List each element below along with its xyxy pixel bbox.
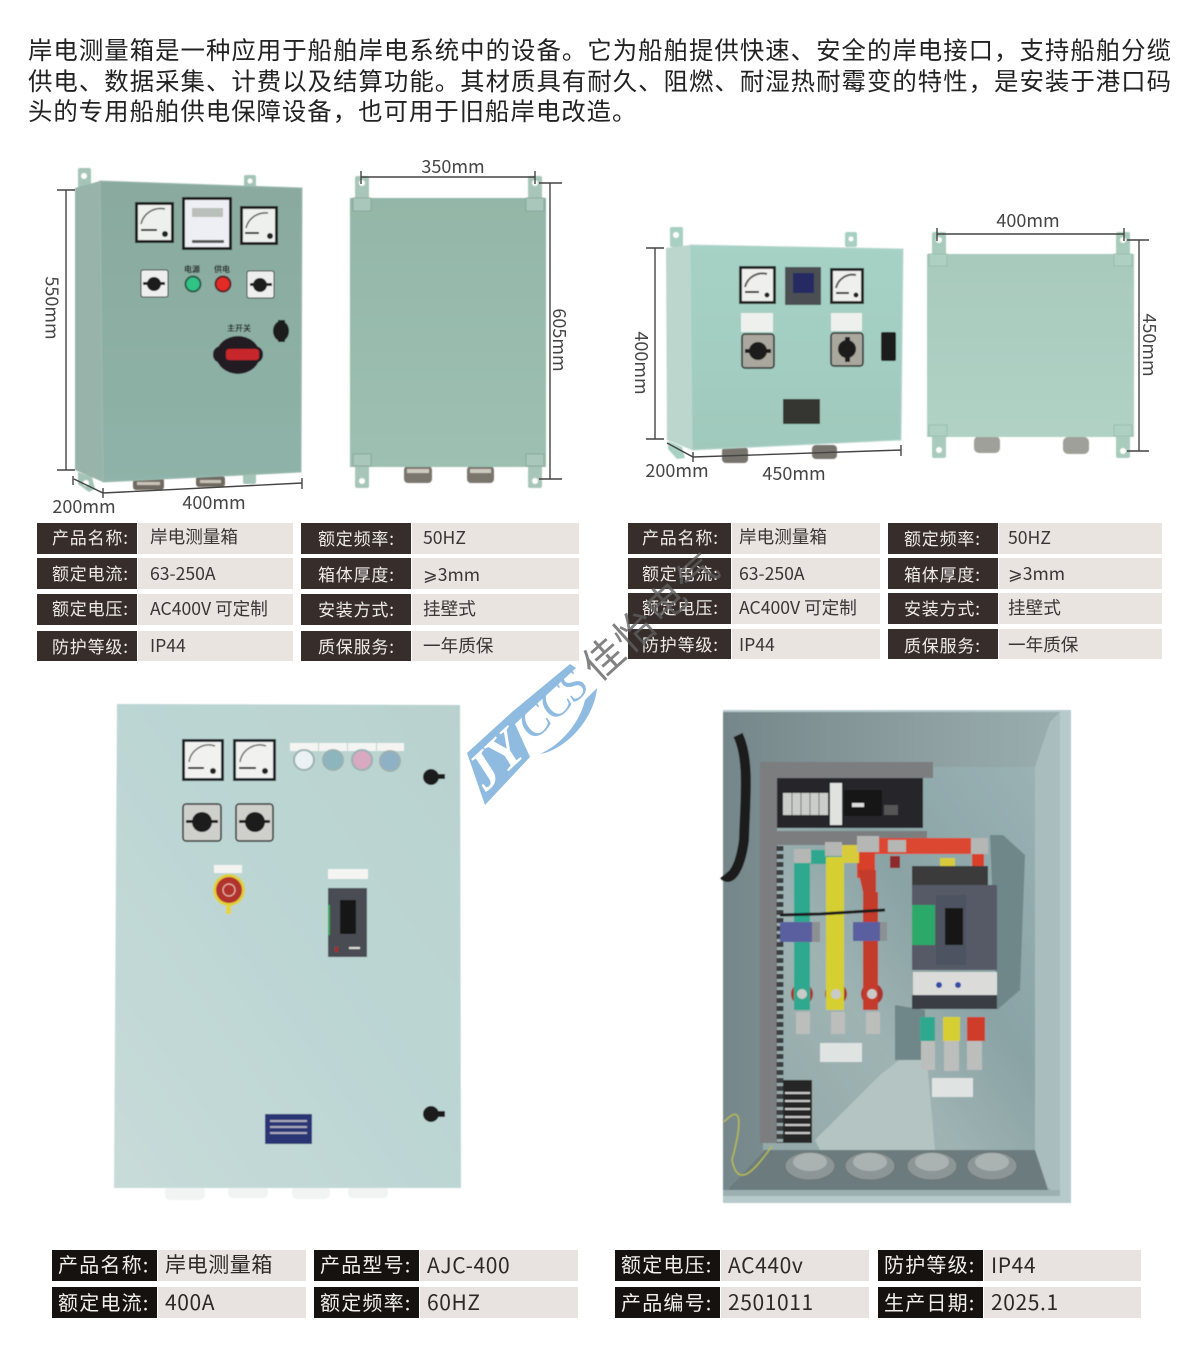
spec table bottom left: 产品名称: bbox=[58, 1249, 150, 1278]
spec table top left bbox=[37, 523, 579, 661]
spec table bottom right: 产品编号: bbox=[621, 1287, 713, 1316]
door lock bbox=[881, 332, 896, 361]
spec table bottom right: 额定电压: bbox=[621, 1249, 713, 1278]
indicator lamps bbox=[294, 750, 400, 771]
spec table top right: 质保服务: bbox=[904, 632, 981, 657]
spec table bottom right: 生产日期: bbox=[884, 1287, 976, 1316]
rotary switches bbox=[742, 333, 863, 368]
spec table bottom left: 400A bbox=[165, 1287, 215, 1317]
outgoing legs bbox=[920, 1017, 985, 1071]
intro paragraph: 供电、数据采集、计费以及结算功能。其材质具有耐久、阻燃、耐湿热耐霉变的特性，是安装于港口码 bbox=[28, 63, 1172, 98]
wiring bbox=[780, 910, 885, 915]
dimensions: front box bbox=[40, 190, 302, 519]
meter left bbox=[135, 202, 174, 243]
emergency stop bbox=[213, 865, 245, 914]
meters bbox=[182, 739, 276, 781]
spec table bottom left: AJC-400 bbox=[427, 1250, 510, 1280]
product photo: 400x450 back view bbox=[927, 232, 1134, 458]
circuit breaker bbox=[328, 869, 368, 957]
spec table top left: 质保服务: bbox=[318, 633, 395, 658]
spec table top right: 防护等级: bbox=[642, 631, 719, 656]
dimensions: 450 box bbox=[629, 248, 901, 486]
mounting ears bbox=[932, 232, 1130, 458]
breaker shadow bbox=[895, 835, 1025, 1060]
slotted duct bbox=[776, 846, 784, 1143]
spec table top left: 产品名称: bbox=[52, 524, 129, 549]
dimensions: front box: 550mm bbox=[40, 276, 66, 340]
spec table top left: AC400V 可定制 bbox=[150, 596, 268, 621]
spec table top left: ⩾3mm bbox=[423, 562, 480, 587]
intro paragraph bbox=[28, 32, 1172, 128]
watermark: JYCCS logo bbox=[455, 660, 597, 805]
spec table bottom right: IP44 bbox=[991, 1250, 1036, 1280]
panel labels: 电源 bbox=[184, 264, 200, 275]
spec table top left: 额定电压: bbox=[52, 595, 129, 620]
spec table bottom right bbox=[615, 1249, 1141, 1318]
door panel bbox=[114, 704, 461, 1188]
spec table top left: 挂壁式 bbox=[423, 596, 476, 621]
spec table top right: 挂壁式 bbox=[1008, 595, 1061, 620]
spec table top right: 箱体厚度: bbox=[904, 561, 981, 586]
spec table top right bbox=[628, 523, 1162, 659]
spec table top left: 防护等级: bbox=[52, 633, 129, 658]
rotary switches bbox=[141, 270, 274, 298]
label plates bbox=[741, 313, 862, 332]
mounting tabs bbox=[78, 168, 256, 492]
cable ducts bbox=[760, 762, 933, 1143]
spec table top right: 50HZ bbox=[1008, 525, 1051, 550]
product photo: 450x400 box front bbox=[666, 227, 903, 463]
spec table bottom left: 岸电测量箱 bbox=[165, 1249, 273, 1279]
dimensions: front box: 400mm bbox=[182, 489, 246, 515]
cable glands bbox=[722, 445, 837, 463]
insulators bbox=[791, 983, 883, 1005]
dimensions: 450 box: 400mm bbox=[629, 331, 655, 395]
spec table top right: ⩾3mm bbox=[1008, 561, 1065, 586]
dimensions: 450 box: 450mm bbox=[762, 460, 826, 486]
spec table top left: 箱体厚度: bbox=[318, 561, 395, 586]
box side bbox=[75, 181, 103, 482]
current transformers bbox=[780, 922, 887, 942]
indicator lamps bbox=[184, 276, 232, 292]
spec table top right: 产品名称: bbox=[642, 524, 719, 549]
product photo: open cabinet interior bbox=[723, 710, 1071, 1203]
dimensions: back box bbox=[361, 153, 573, 479]
panel labels: 主开关 bbox=[227, 323, 251, 334]
intro paragraph: 岸电测量箱是一种应用于船舶岸电系统中的设备。它为船舶提供快速、安全的岸电接口，支持船舶分缆 bbox=[28, 32, 1172, 67]
breaker bbox=[912, 866, 997, 1009]
meter center bbox=[182, 197, 232, 250]
spec table bottom right: AC440v bbox=[728, 1250, 803, 1280]
rotary switches bbox=[183, 804, 273, 841]
cable glands bbox=[404, 466, 494, 483]
spec table top left: 额定电流: bbox=[52, 560, 129, 585]
door locks bbox=[423, 769, 445, 1122]
box front bbox=[690, 245, 903, 450]
spec table top left: 一年质保 bbox=[423, 633, 494, 658]
spec table top left: IP44 bbox=[150, 633, 186, 658]
enclosure and walls bbox=[723, 710, 1071, 1203]
nameplate bbox=[783, 399, 820, 424]
ground wire bbox=[724, 1114, 772, 1175]
spec table bottom left bbox=[52, 1249, 578, 1318]
spec table bottom left: 60HZ bbox=[427, 1287, 481, 1317]
box back bbox=[927, 254, 1134, 437]
spec table top left: 63-250A bbox=[150, 561, 216, 586]
mounting ears bbox=[355, 176, 542, 488]
intro paragraph: 头的专用船舶供电保障设备，也可用于旧船岸电改造。 bbox=[28, 93, 637, 128]
panel labels: 供电 bbox=[214, 264, 230, 275]
spec table bottom left: 额定频率: bbox=[320, 1287, 412, 1316]
spec table top right: 安装方式: bbox=[904, 595, 981, 620]
spec table top left: 岸电测量箱 bbox=[150, 524, 238, 549]
dimensions: back box: 605mm bbox=[547, 308, 573, 372]
watermark: JYCCS logo: JY bbox=[455, 717, 540, 801]
ear brackets bbox=[929, 254, 1132, 436]
dimensions: 400 back: 450mm bbox=[1137, 313, 1163, 377]
bottom glands bbox=[165, 1186, 388, 1200]
box side bbox=[666, 245, 692, 450]
terminal strip bbox=[783, 1080, 812, 1143]
conduit knockouts bbox=[785, 1152, 1017, 1180]
mounting tabs bbox=[668, 227, 857, 459]
dimensions: 400 back bbox=[937, 207, 1163, 451]
spec table top right: 额定电压: bbox=[642, 594, 719, 619]
spec table bottom left: 额定电流: bbox=[58, 1287, 150, 1316]
product photo: 400x550 box front bbox=[75, 168, 302, 492]
label plates bbox=[820, 1043, 973, 1097]
watermark: JYCCS logo: CCS bbox=[506, 660, 597, 749]
spec table top left: 额定频率: bbox=[318, 525, 395, 550]
busbars bbox=[794, 857, 880, 1034]
cable glands bbox=[974, 436, 1089, 454]
spec table top left: 安装方式: bbox=[318, 596, 395, 621]
meters bbox=[739, 266, 864, 305]
panel labels bbox=[184, 264, 251, 334]
dimensions: 400 back: 400mm bbox=[996, 207, 1060, 233]
box back bbox=[350, 198, 546, 467]
mounting plate bbox=[763, 767, 1035, 1150]
spec table top right: 岸电测量箱 bbox=[739, 524, 827, 549]
spec table top right: AC400V 可定制 bbox=[739, 595, 857, 620]
spec table top left: 50HZ bbox=[423, 525, 466, 550]
label strip bbox=[290, 743, 404, 751]
door lock bbox=[273, 320, 289, 342]
spec table bottom right: 2501011 bbox=[728, 1287, 814, 1317]
watermark: company name: 佳怡电气 bbox=[567, 536, 731, 692]
product photo: large panel front bbox=[114, 704, 461, 1200]
spec table top right: 63-250A bbox=[739, 561, 805, 586]
dimensions: front box: 200mm bbox=[52, 493, 116, 519]
dimensions: 450 box: 200mm bbox=[645, 457, 709, 483]
nameplate bbox=[265, 1114, 312, 1144]
dimensions: back box: 350mm bbox=[421, 153, 485, 179]
spec table top right: 一年质保 bbox=[1008, 632, 1079, 657]
product photo: 350x605 back view bbox=[350, 176, 546, 488]
top red bus bbox=[794, 836, 988, 878]
main switch handle bbox=[213, 336, 263, 374]
spec table bottom right: 2025.1 bbox=[991, 1287, 1059, 1317]
meter right bbox=[240, 206, 278, 245]
cable glands bbox=[133, 476, 225, 490]
box front bbox=[100, 181, 302, 482]
spec table top right: IP44 bbox=[739, 632, 775, 657]
spec table top right: 额定电流: bbox=[642, 560, 719, 585]
plate light reflection bbox=[815, 1040, 935, 1150]
din rail devices bbox=[777, 778, 923, 828]
ear brackets bbox=[353, 198, 544, 466]
cable bbox=[724, 735, 746, 877]
spec table bottom left: 产品型号: bbox=[320, 1249, 412, 1278]
spec table bottom right: 防护等级: bbox=[884, 1249, 976, 1278]
spec table top right: 额定频率: bbox=[904, 525, 981, 550]
